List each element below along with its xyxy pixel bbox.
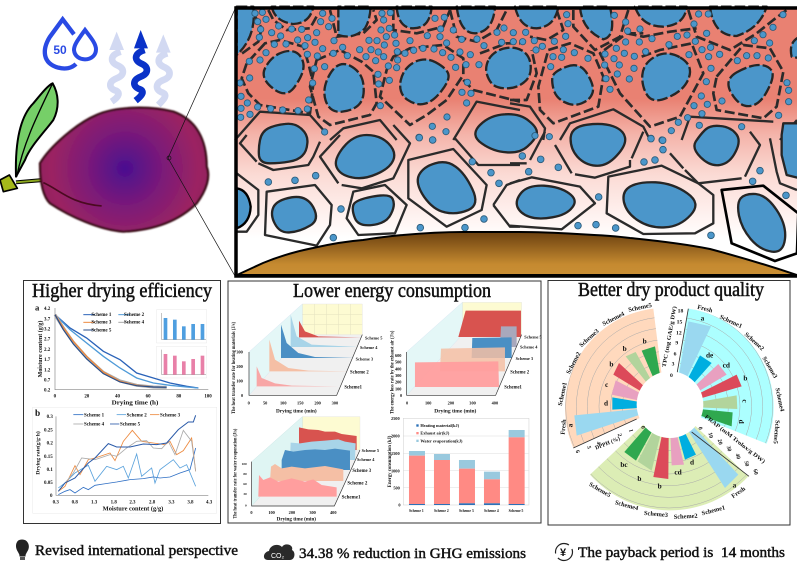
axis: TPC: 18 [678,309,683,315]
chart b: drying rate: 3.8 [187,501,194,506]
sector: FRAP [590,424,750,510]
3D chart: heat transfer for heating materials: 200 [236,364,243,369]
chart a: moisture content [35,302,212,406]
icon: rising vapour right [156,34,171,105]
chart a: moisture content: 3.2 [44,328,51,333]
3D chart: heat transfer for water evaporation: 30 [243,492,247,496]
sector: TPC [676,308,774,444]
3D chart: heat transfer for water evaporation: Scheme 3 [352,469,372,474]
3D chart: heat transfer for heating materials: 300 [236,350,243,355]
3D chart: heat transfer for heating materials: Drying time (min) [276,407,317,414]
water vacuoles upper left [237,7,531,112]
chart b: drying rate: 2.3 [129,501,136,506]
significance letters: d [690,458,694,467]
chart b: drying rate: 2.8 [149,501,156,506]
significance letters: c [605,380,609,389]
outer scheme labels: Fresh [560,419,568,435]
outer scheme labels: Fresh [697,304,714,315]
axis: TPC: TPC (mg GAE/g DW) [661,306,678,368]
icon: water saving drops 50: 50 [53,43,67,57]
3D chart: heat transfer for water evaporation: Scheme 2 [347,482,368,487]
chart b: drying rate: 0.3 [53,501,59,506]
3D chart: heat transfer for heating materials: 0 [241,393,243,398]
3D chart: heat transfer for heating materials: Scheme 3 [356,356,374,361]
leaf [16,83,58,177]
chart a: moisture content: 0.2 [44,389,51,394]
outer scheme labels [557,302,786,521]
stem [0,175,43,192]
3D chart: energy loss by exhaust air: Scheme1 [504,386,523,391]
outer scheme labels: Scheme1 [557,382,569,407]
3D chart: heat transfer for water evaporation: Scheme 5 [362,448,379,453]
axis: TPC: 12 [676,331,682,337]
outer scheme labels: Scheme2 [743,331,765,352]
water droplets lower left [265,134,502,241]
panel: higher drying efficiency [24,280,220,524]
chart b: drying rate: Scheme 3 [160,413,181,418]
chart a: moisture content: 4.2 [44,307,51,312]
water vacuoles lower right [517,123,797,252]
axis: TPC [661,306,683,379]
chart a: moisture content: 100 [204,394,212,399]
axis: DPPH: 4 [595,441,601,445]
text: GHG reduction: 34.38 % reduction in GHG emissions [299,546,526,562]
significance letters: bc [620,460,628,469]
3D chart: heat transfer for heating materials: 150 [297,401,303,406]
3D chart: heat transfer for water evaporation: 0 [245,504,247,508]
axis: FRAP: 10 [706,432,714,439]
3D chart: heat transfer for heating materials: 0 [248,401,250,406]
axis: DPPH: DPPH (%) [594,435,621,452]
significance letters: b [623,344,627,353]
icon: yen payback [556,544,572,560]
axis: FRAP [696,413,767,476]
chart b: drying rate [33,407,217,513]
icon: rising vapour centre [134,30,148,101]
axis: TPC: 9 [675,341,678,347]
icon: yen payback: ¥ [560,547,567,559]
chart b: drying rate: 0.25 [44,428,53,433]
stacked bar chart: energy consumption: Heating material(kJ) [420,423,460,428]
3D chart: heat transfer for heating materials: The heat transfer rate for heating materials (J/s) [232,322,237,414]
chart a: moisture content: Scheme 2 [124,313,145,318]
3D chart: energy loss by exhaust air: 200 [448,401,454,406]
polar bar chart [557,293,786,521]
3D chart: energy loss by exhaust air: Scheme 4 [520,345,538,350]
3D chart: energy loss by exhaust air: 500 [395,360,401,365]
heading: lower energy consumption: Lower energy consumption [293,280,491,302]
chart a: moisture content: 20 [84,394,90,399]
stacked bar chart: energy consumption: 2500 [391,416,400,421]
3D chart: energy loss by exhaust air [390,302,542,414]
chart a: moisture content: Scheme 3 [91,321,112,326]
zoom callout lines [167,9,235,276]
axis: FRAP: FRAP (mM Trolox/g DW) [703,413,767,465]
significance letters: b [637,474,641,483]
3D chart: energy loss by exhaust air: 100 [425,401,431,406]
chart b: drying rate: Scheme 1 [84,413,105,418]
3D chart: energy loss by exhaust air: 400 [492,401,498,406]
chart a: moisture content: 1.7 [44,358,51,363]
significance letters: b [743,374,747,383]
significance letters: a [701,314,705,323]
axis: TPC: 15 [677,319,682,325]
icon: CO2 cloud [264,544,294,560]
3D chart: heat transfer for heating materials: 200 [314,401,321,406]
3D chart: heat transfer for heating materials: 300 [332,401,338,406]
chart b: drying rate: 4.3 [206,501,213,506]
stacked bar chart: energy consumption: Exhaust air(kJ) [420,431,450,436]
3D chart: heat transfer for water evaporation: 200 [289,510,295,515]
frame [236,8,797,276]
cell walls upper left [235,10,520,140]
stacked bar chart: energy consumption: Scheme 4 [484,509,499,513]
significance letters: b [643,337,647,346]
axis: TPC: 6 [674,351,677,357]
plum illustration [0,19,208,232]
3D chart: heat transfer for water evaporation: Scheme1 [342,496,361,501]
3D chart: energy loss by exhaust air: 0 [400,393,402,398]
chart b: drying rate: 3.3 [168,501,175,506]
inset bar chart: pink [157,346,207,378]
significance letters: cd [674,467,682,476]
outer scheme labels: Scheme5 [628,302,653,314]
3D chart: heat transfer for heating materials: 50 [263,401,267,406]
stacked bar chart: energy consumption: 1500 [391,451,400,456]
outer scheme labels: Scheme4 [774,387,786,413]
3D chart: energy loss by exhaust air: 300 [469,401,476,406]
axis: TPC: 3 [672,362,675,368]
heading: higher drying efficiency: Higher drying efficiency [32,280,212,302]
3D chart: energy loss by exhaust air: 100 [395,386,401,391]
significance letters: a [566,423,575,427]
3D chart: energy loss by exhaust air: 200 [395,380,401,385]
chart b: drying rate: 0.3 [47,415,53,420]
stacked bar chart: energy consumption: Scheme 5 [509,509,524,513]
significance letters: a [733,481,737,490]
chart b: drying rate: 0.15 [44,455,53,460]
cell walls upper right [510,10,797,140]
chart a: moisture content: Moisture content (g/g) [37,321,44,377]
axis: FRAP: 50 [742,460,750,467]
stacked bar chart: energy consumption: Energy consumption (kJ) [388,435,393,487]
outer scheme labels: Scheme5 [588,481,612,499]
heading: better dry product quality: Better dry product quality [578,279,764,301]
significance letters: b [658,482,662,491]
stacked bar chart: energy consumption: Scheme 1 [409,509,424,513]
3D chart: energy loss by exhaust air: 600 [395,353,401,358]
axis: DPPH: 6 [574,450,580,454]
significance letters: d [737,420,746,424]
3D chart: heat transfer for water evaporation: 60 [243,482,247,486]
axis: DPPH: 5 [585,445,592,450]
3D chart: energy loss by exhaust air: Drying time (min) [434,407,476,414]
chart b: drying rate: Scheme 4 [84,423,105,428]
3D chart: energy loss by exhaust air: Scheme 2 [510,370,530,375]
stacked bar chart: energy consumption: Water evaporation(kJ) [420,438,463,443]
chart a: moisture content: 1.2 [44,368,51,373]
stacked bar chart: energy consumption: Scheme 2 [434,509,449,513]
chart b: drying rate: 0 [50,494,53,499]
3D chart: heat transfer for heating materials [232,304,382,414]
stacked bar chart: energy consumption [388,416,529,513]
chart b: drying rate: 0.2 [47,442,53,447]
3D chart: heat transfer for water evaporation: Scheme 4 [357,457,375,462]
3D chart: energy loss by exhaust air: The energy loss rate by the exhaust air (J/s) [390,330,395,414]
3D chart: heat transfer for heating materials: 100 [280,401,286,406]
stacked bar chart: energy consumption: 500 [393,485,400,490]
axis: FRAP: 30 [725,445,732,452]
chart a: moisture content: 80 [176,394,182,399]
axis: FRAP: 60 [751,469,759,476]
chart b: drying rate: Moisture content (g/g) [103,506,163,513]
axis: DPPH: 0 [639,425,646,430]
chart b: drying rate: b [35,409,40,419]
sector: DPPH [565,308,662,448]
icon: rising vapour left [109,32,124,102]
3D chart: heat transfer for water evaporation: The heat transfer rate for water evaporation (J/s) [234,428,239,519]
significance letters [566,314,749,491]
significance letters: c [740,399,749,403]
water droplets upper right [519,11,792,143]
chart b: drying rate: Drying rate(g/g·h) [34,431,41,475]
chart a: moisture content: Scheme 5 [91,328,112,333]
significance letters: d [604,398,608,407]
3D chart: heat transfer for water evaporation [234,417,379,523]
stacked bar chart: energy consumption: 1000 [391,468,400,473]
inset bar chart: blue [157,310,207,343]
panel: lower energy consumption [228,280,542,523]
3D chart: energy loss by exhaust air: 400 [395,366,401,371]
outer scheme labels: Scheme1 [701,504,726,517]
chart b: drying rate: 1.8 [111,501,117,506]
centre hole [637,371,703,438]
3D chart: energy loss by exhaust air: Scheme 3 [516,356,534,361]
axis: DPPH: 2 [616,433,622,437]
icon: water saving drops 50 [45,19,96,68]
chart b: drying rate: 1.3 [91,501,98,506]
panel: better dry product quality [548,279,790,525]
water vacuoles lower left [237,114,537,232]
cell walls lower right [510,132,797,261]
outer scheme labels: Scheme4 [601,310,627,328]
3D chart: heat transfer for water evaporation: 0 [250,510,253,515]
3D chart: heat transfer for heating materials: Scheme1 [344,386,363,391]
text: payback period: The payback period is 14 months [578,545,785,561]
chart a: moisture content: 3.7 [44,317,51,322]
icon: CO2 cloud: CO₂ [271,553,284,560]
3D chart: heat transfer for water evaporation: 100 [268,510,275,515]
axis: DPPH: 1 [627,429,634,433]
chart a: moisture content: 40 [115,394,120,399]
3D chart: heat transfer for water evaporation: 80 [243,472,247,476]
3D chart: heat transfer for water evaporation: 100 [242,462,247,466]
significance letters: de [706,350,714,359]
outer scheme labels: Fresh [730,485,747,500]
axis: DPPH [574,425,646,454]
cell walls lower left [237,125,520,246]
outer scheme labels: Scheme2 [565,351,582,375]
chart b: drying rate: 0.1 [47,468,53,473]
stacked bar chart: energy consumption: Scheme 3 [459,509,474,513]
axis: FRAP: 20 [716,439,723,446]
outer scheme labels: Scheme4 [614,499,640,512]
water droplets lower right [519,135,789,239]
chart b: drying rate: 0.8 [72,501,78,506]
outer scheme labels: Scheme3 [644,510,668,519]
outer scheme labels: Scheme2 [674,513,698,521]
significance letters: b [609,359,613,368]
3D chart: heat transfer for water evaporation: 300 [309,510,316,515]
3D chart: energy loss by exhaust air: Scheme 5 [524,335,542,340]
stacked bar chart: energy consumption: 0 [398,503,400,508]
3D chart: heat transfer for heating materials: Scheme 5 [365,335,382,340]
axis: TPC: 0 [670,373,673,379]
chart a: moisture content: 60 [146,394,151,399]
chart b: drying rate: Scheme 5 [120,423,141,428]
chart b: drying rate: 0.05 [44,481,53,486]
outer scheme labels: Scheme5 [772,420,781,444]
3D chart: heat transfer for heating materials: 100 [236,378,243,383]
3D chart: energy loss by exhaust air: 0 [406,401,408,406]
panel: plum tissue microstructure [235,7,797,276]
stacked bar chart: energy consumption: 2000 [391,434,400,439]
3D chart: heat transfer for heating materials: Scheme 2 [350,371,369,376]
3D chart: heat transfer for water evaporation: 400 [330,510,336,515]
chart a: moisture content: 0.7 [44,378,51,383]
text: revised international perspective: Revised international perspective [35,543,238,559]
plum fruit [40,108,208,232]
3D chart: heat transfer for heating materials: Scheme 4 [360,345,378,350]
plum skin layer [237,232,797,275]
water vacuoles upper right [515,7,797,106]
chart a: moisture content: 0 [54,394,57,399]
axis: FRAP: 0 [696,426,703,431]
chart a: moisture content: 2.2 [44,348,51,353]
water droplets upper left [237,9,516,143]
outer scheme labels: Scheme3 [578,328,601,349]
chart a: moisture content: Scheme 1 [91,313,112,318]
axis: FRAP: 40 [734,453,741,460]
chart a: moisture content: 2.7 [44,338,51,343]
chart a: moisture content: a [35,302,40,312]
significance letters: cd [723,360,730,369]
chart a: moisture content: Scheme 4 [124,321,145,326]
3D chart: heat transfer for water evaporation: Drying time (min) [277,516,316,523]
outer scheme labels: Scheme1 [718,314,743,330]
outer scheme labels: Scheme3 [761,355,779,380]
icon: light bulb [17,540,28,560]
chart a: moisture content: Drying time (h) [112,399,158,406]
chart b: drying rate: Scheme 2 [127,413,147,418]
3D chart: energy loss by exhaust air: 300 [395,373,401,378]
